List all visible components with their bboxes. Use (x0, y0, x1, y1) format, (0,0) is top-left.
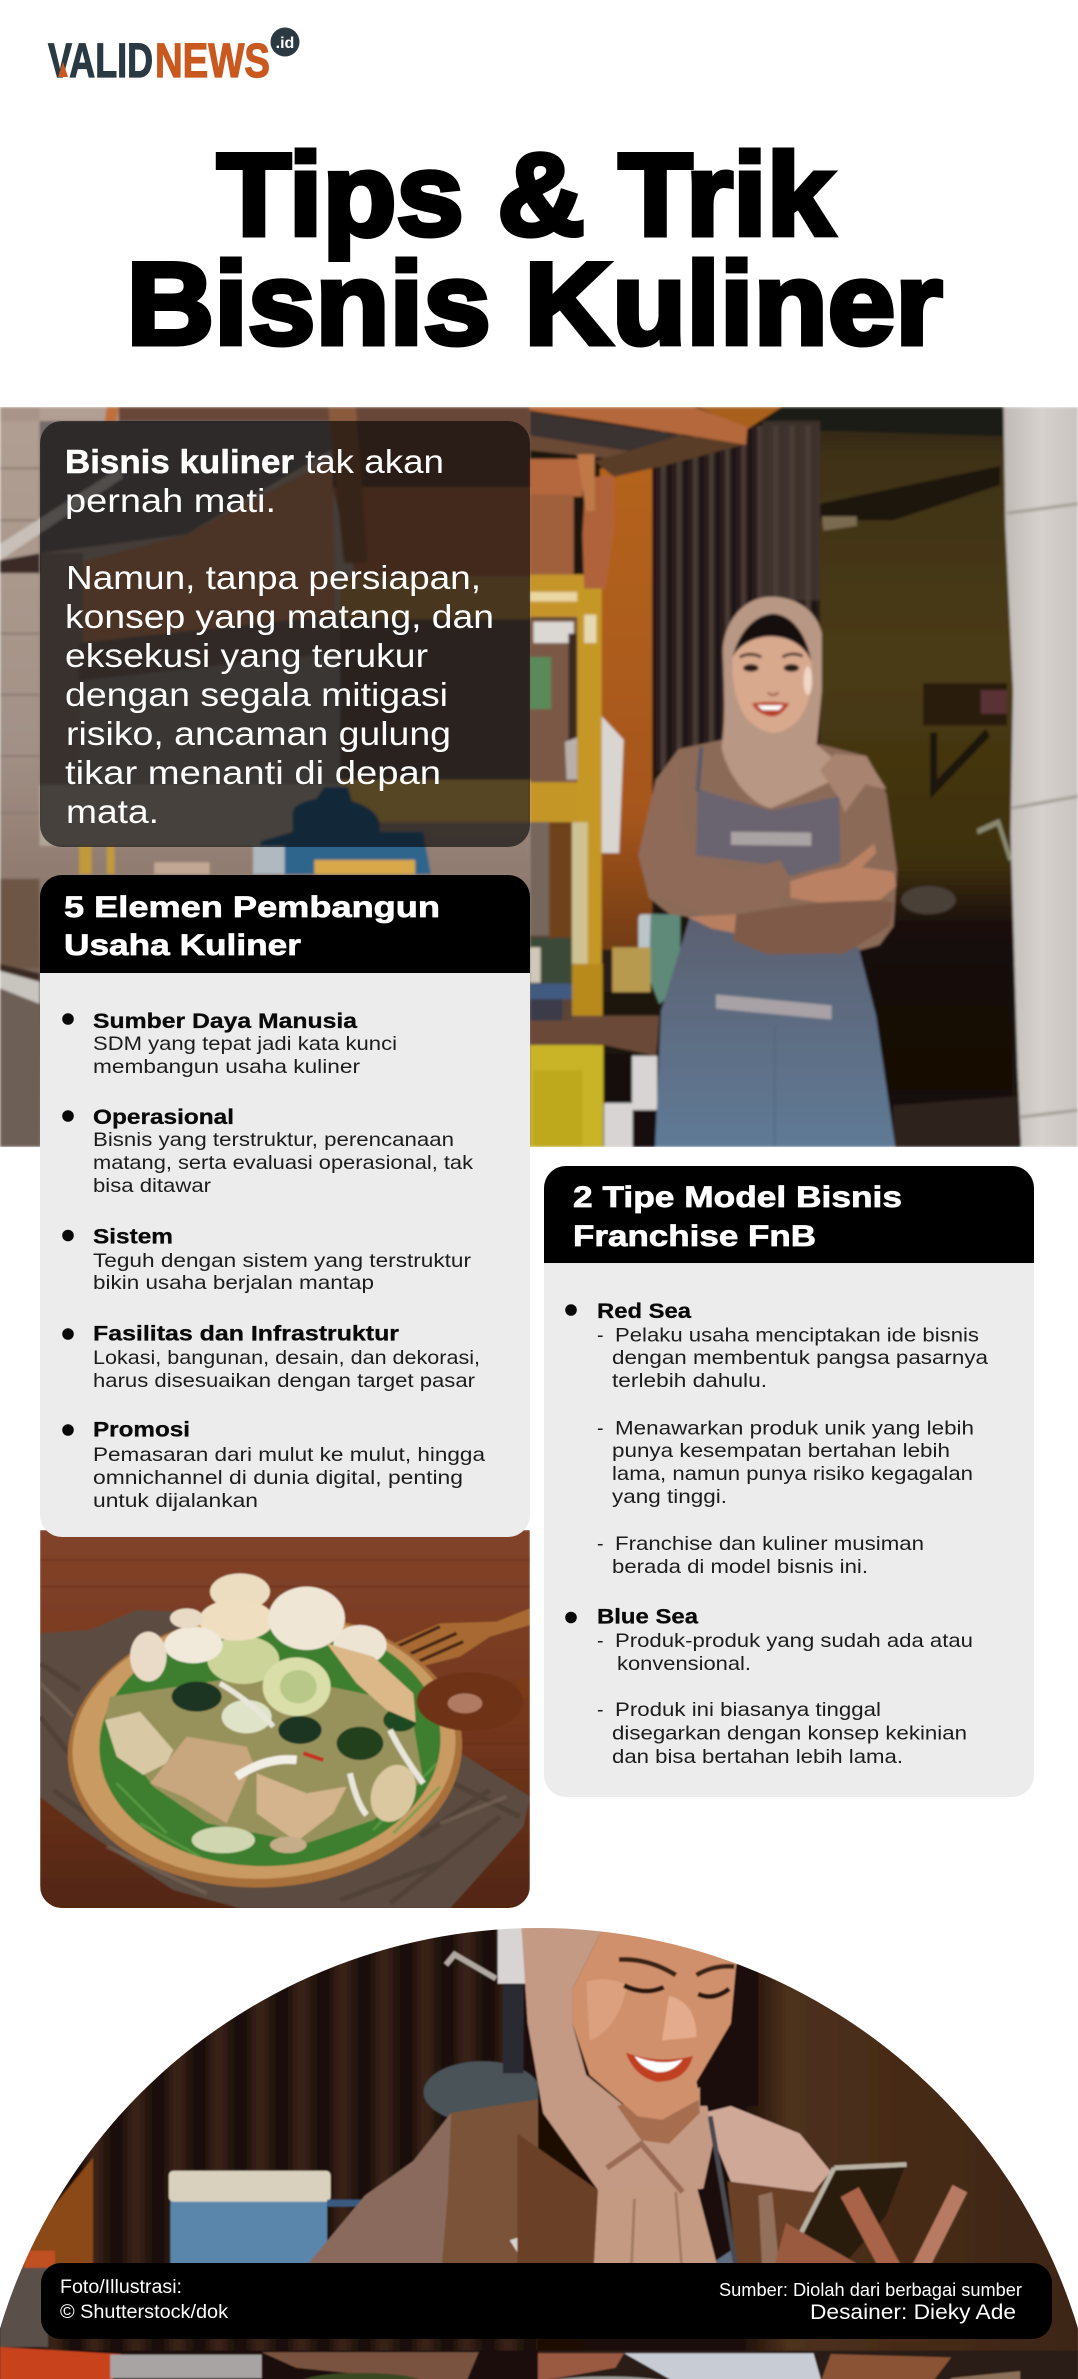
photo credit: © Shutterstock/dok (60, 2302, 229, 2323)
dark gap beside face (700, 1961, 758, 2106)
title: Tips & Trik (217, 129, 835, 260)
table items (65, 2350, 538, 2379)
panel heading: 2 Tipe Model Bisnis (573, 1181, 902, 1214)
intro text: dengan segala mitigasi (65, 676, 448, 713)
item: Blue Sea: disegarkan dengan konsep kekinian (612, 1722, 967, 1744)
cart left (530, 615, 579, 1039)
panel heading: Franchise FnB (573, 1220, 816, 1253)
item: Red Sea: Menawarkan produk unik yang lebih (615, 1418, 974, 1440)
fork (395, 1608, 530, 1666)
table foreground (538, 2350, 1078, 2379)
stall left side and wall (0, 407, 573, 1147)
intro panel (40, 421, 530, 847)
logo badge .id: .id (276, 35, 294, 52)
title (126, 129, 942, 369)
face (732, 636, 812, 733)
item: Operasional: Bisnis yang terstruktur, perencanaan (93, 1129, 454, 1151)
item: Red Sea (565, 1299, 988, 1578)
item: Fasilitas dan Infrastruktur: Fasilitas dan Infrastruktur (93, 1322, 400, 1346)
intro text: Namun, tanpa persiapan, (66, 559, 481, 596)
item: Promosi: Pemasaran dari mulut ke mulut, hingga (93, 1444, 485, 1466)
right half of arc photo (517, 1906, 1078, 2379)
apron (690, 2251, 741, 2278)
item: Promosi: omnichannel di dunia digital, penting (93, 1467, 463, 1489)
intro text: Bisnis kuliner (65, 443, 294, 480)
item: Sistem: Sistem (93, 1224, 173, 1248)
item: Fasilitas dan Infrastruktur: Lokasi, bangunan, desain, dan dekorasi, (93, 1347, 480, 1369)
item: Blue Sea: dan bisa bertahan lebih lama. (612, 1746, 903, 1768)
item: Blue Sea (565, 1604, 973, 1768)
item: Promosi (62, 1418, 485, 1512)
item: Red Sea: - (597, 1324, 604, 1346)
intro text (65, 443, 494, 830)
checker tiles (604, 1054, 657, 1147)
source and designer: Sumber: Diolah dari berbagai sumber (719, 2280, 1022, 2300)
logo (48, 28, 300, 88)
phone (786, 2163, 907, 2268)
inner cap (733, 614, 811, 662)
item: Operasional: matang, serta evaluasi operasional, tak (93, 1152, 473, 1174)
title: Bisnis Kuliner (126, 238, 942, 369)
logo V accent (58, 62, 68, 77)
intro text: pernah mati. (65, 482, 276, 519)
stall right side, woman and room (530, 407, 1078, 1147)
item: Red Sea: Pelaku usaha menciptakan ide bisnis (615, 1324, 979, 1346)
source and designer: Desainer: Dieky Ade (810, 2301, 1016, 2324)
counter (530, 1016, 659, 1056)
orange wall (600, 468, 652, 959)
clutter (636, 912, 655, 950)
roof (698, 407, 782, 430)
item: Red Sea: lama, namun punya risiko kegagalan (612, 1463, 973, 1485)
item: Promosi: Promosi (93, 1418, 190, 1442)
smile (752, 702, 789, 716)
cutting board (40, 1610, 530, 1908)
item: Red Sea: yang tinggi. (612, 1486, 727, 1508)
item: Sumber Daya Manusia (62, 1009, 397, 1078)
hijab (520, 1906, 714, 2196)
photo credit (60, 2277, 229, 2323)
logo wordmark NEWS: NEWS (155, 35, 270, 88)
crossed arms (654, 778, 789, 876)
panel heading: 5 Elemen Pembangun (64, 891, 440, 924)
item: Blue Sea: Blue Sea (597, 1604, 699, 1628)
item: Red Sea: terlebih dahulu. (612, 1370, 767, 1392)
item: Fasilitas dan Infrastruktur (62, 1322, 480, 1392)
item: Sistem (62, 1224, 472, 1294)
item: Promosi: untuk dijalankan (93, 1490, 258, 1512)
woman torso shirt (638, 740, 897, 954)
hijab (722, 597, 834, 808)
item: Blue Sea: - (597, 1699, 604, 1721)
wooden spoon (417, 1672, 530, 1731)
item: Sistem: bikin usaha berjalan mantap (93, 1272, 374, 1294)
shirt (517, 2134, 598, 2278)
item: Blue Sea: - (597, 1630, 604, 1652)
eyes and brows (743, 664, 799, 672)
item: Red Sea: Red Sea (597, 1299, 692, 1323)
wooden plate (66, 1622, 463, 1888)
hero photo: food stall owner (0, 407, 1078, 1147)
apron skirt (655, 914, 895, 1147)
smiling face (572, 1906, 752, 2120)
intro text: eksekusi yang terukur (65, 637, 428, 674)
item: Red Sea: Franchise dan kuliner musiman (615, 1533, 924, 1555)
item: Blue Sea: konvensional. (617, 1653, 751, 1675)
apron pocket trims (731, 832, 811, 846)
panel: 2 tipe model bisnis (544, 1166, 1034, 1797)
wooden table (40, 1530, 530, 1925)
item: Sistem: Teguh dengan sistem yang terstruktur (93, 1250, 472, 1272)
white pillar (1004, 407, 1078, 1147)
source and designer (719, 2280, 1022, 2324)
item: Operasional: bisa ditawar (93, 1175, 212, 1197)
plastic bag (602, 716, 624, 853)
item: Red Sea: berada di model bisnis ini. (612, 1556, 868, 1578)
food photo (40, 1530, 530, 1925)
apron bib (696, 789, 840, 877)
item: Red Sea: punya kesempatan bertahan lebih (612, 1440, 950, 1462)
logo wordmark VALID: VALID (48, 35, 153, 88)
item: Red Sea: - (597, 1418, 604, 1440)
back room (817, 407, 1012, 1147)
intro text: mata. (66, 793, 159, 830)
intro text: konsep yang matang, dan (65, 598, 494, 635)
item: Red Sea: dengan membentuk pangsa pasarnya (612, 1347, 988, 1369)
item: Red Sea: - (597, 1533, 604, 1555)
neck shadow (617, 2082, 700, 2144)
panel body (544, 1250, 1034, 1797)
photo credit: Foto/Illustrasi: (60, 2277, 182, 2298)
brows and eyes (619, 1959, 734, 1975)
sleeve and shirt (329, 2099, 540, 2263)
intro text: tak akan (305, 443, 444, 480)
item: Fasilitas dan Infrastruktur: harus disesuaikan dengan target pasar (93, 1370, 476, 1392)
logo badge .id (270, 28, 300, 56)
blue pot (167, 2169, 362, 2263)
item: Operasional: Operasional (93, 1105, 234, 1129)
item: Blue Sea: Produk ini biasanya tinggal (615, 1699, 881, 1721)
panel heading (40, 875, 530, 973)
intro text: tikar menanti di depan (65, 754, 441, 791)
corrugated wall (649, 426, 820, 770)
yellow post (530, 575, 598, 617)
item: Sumber Daya Manusia: SDM yang tepat jadi kata kunci (93, 1033, 397, 1055)
bottom arc photo (0, 1899, 1078, 2379)
panel body (40, 960, 530, 1537)
item: Blue Sea: Produk-produk yang sudah ada atau (615, 1630, 973, 1652)
hand (772, 2223, 882, 2278)
intro text: risiko, ancaman gulung (66, 715, 451, 752)
item: Sumber Daya Manusia: membangun usaha kuliner (93, 1056, 361, 1078)
background vase (424, 1913, 541, 2123)
left half of arc photo (0, 1928, 540, 2379)
panel: 5 elemen (40, 875, 530, 1537)
plate contents (105, 1573, 424, 1853)
scarf shoulder (703, 2106, 831, 2192)
item: Sumber Daya Manusia: Sumber Daya Manusia (93, 1009, 358, 1033)
panel heading: Usaha Kuliner (64, 929, 302, 962)
smile (626, 2053, 693, 2082)
footer bar (41, 2263, 1052, 2339)
lower cart (530, 1045, 603, 1147)
wooden hood (530, 459, 582, 497)
panel heading (544, 1166, 1034, 1263)
item: Operasional (62, 1105, 473, 1197)
